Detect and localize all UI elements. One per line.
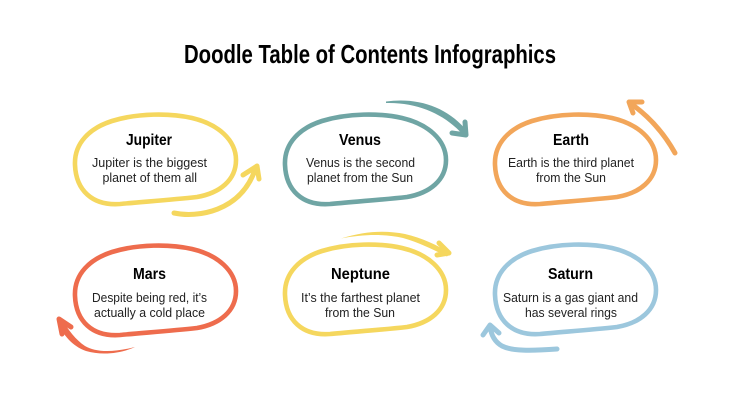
arrow: Earth [629, 102, 675, 153]
text: Mars: actually a cold place [94, 306, 205, 320]
arrow: Saturn [483, 325, 557, 350]
text: Venus [306, 156, 415, 185]
text: Jupiter: Jupiter is the biggest [92, 156, 208, 170]
panel: Jupiter [75, 115, 259, 214]
panel: Venus [285, 100, 468, 204]
outline: Earth [495, 115, 656, 204]
heading: Mars: Mars [133, 266, 166, 283]
text: Venus: Venus is the second [306, 156, 415, 170]
panel: Neptune [285, 232, 450, 334]
text: Saturn [503, 291, 638, 320]
arrow: Jupiter [174, 166, 259, 214]
outline: Neptune [285, 245, 446, 334]
arrow: Neptune [341, 232, 450, 256]
text: Jupiter [92, 156, 208, 185]
text: Neptune: It’s the farthest planet [301, 291, 421, 305]
panel: Saturn [483, 245, 656, 350]
heading: Earth: Earth [553, 132, 589, 149]
arrow: Mars [57, 319, 135, 354]
heading: Neptune: Neptune [331, 266, 390, 283]
title: Doodle Table of Contents Infographics [184, 39, 556, 69]
text: Mars: Despite being red, it’s [92, 291, 207, 305]
text: Jupiter: planet of them all [102, 171, 197, 185]
text: Earth: Earth is the third planet [508, 156, 635, 170]
text: Earth [508, 156, 635, 185]
outline: Mars [75, 246, 236, 335]
text: Venus: planet from the Sun [307, 171, 413, 185]
text: Earth: from the Sun [536, 171, 606, 185]
arrow: Venus [386, 100, 468, 135]
outline: Jupiter [75, 115, 236, 204]
outline: Venus [285, 115, 446, 204]
heading: Saturn: Saturn [548, 266, 593, 283]
text: Neptune [301, 291, 421, 320]
text: Mars [92, 291, 207, 320]
heading: Jupiter: Jupiter [126, 132, 172, 149]
panel: Earth [495, 102, 675, 204]
outline: Saturn [495, 245, 656, 334]
text: Saturn: has several rings [525, 306, 617, 320]
text: Neptune: from the Sun [325, 306, 395, 320]
panel: Mars [57, 246, 236, 354]
heading: Venus: Venus [339, 132, 381, 149]
text: Saturn: Saturn is a gas giant and [503, 291, 638, 305]
